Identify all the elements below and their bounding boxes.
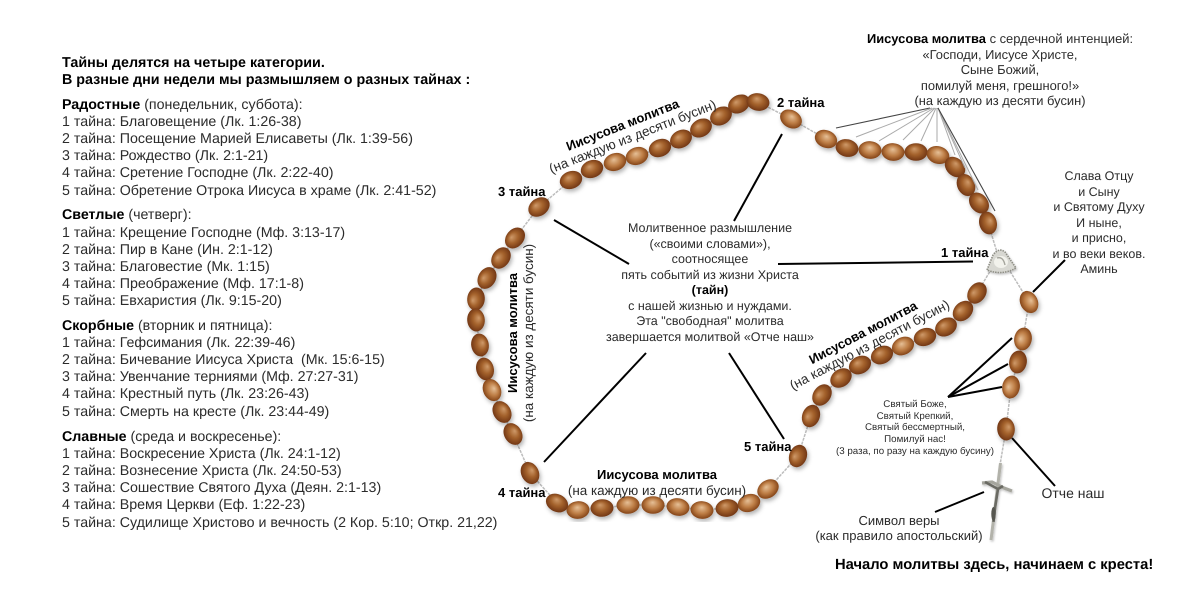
arrow: our father to bead [1012,438,1055,486]
heading: mysteries intro: Тайны делятся на четыре категории. [62,55,325,71]
arrow: meditation to first mystery [778,262,973,264]
text block: joyful mysteries: 3 тайна: Рождество (Лк. 2:1-21) [62,148,268,164]
text block: glory be: Слава Отцу [1064,169,1134,183]
arrow: creed to crucifix [935,492,984,512]
text block: luminous mysteries: Светлые (четверг): [62,207,192,223]
text block: joyful mysteries: 4 тайна: Сретение Господне (Лк. 2:22-40) [62,165,333,181]
arrow: meditation to second mystery [734,134,782,221]
label: jesus prayer bottom decade: (на каждую из десяти бусин) [568,483,746,498]
text block: meditation description: завершается молитвой «Отче наш» [606,330,814,344]
label: creed: Символ веры [858,513,940,528]
heading: mysteries intro: В разные дни недели мы размышляем о разных тайнах : [62,72,470,88]
text block: holy god [836,399,994,457]
label: jesus prayer left decade: Иисусова молитва [505,272,520,393]
label: jesus prayer upper decade: (на каждую из десяти бусин) [547,97,718,176]
label: mystery 1: 1 тайна [941,245,989,260]
arrow: glory be to bead [1033,260,1065,292]
icon: crucifix [982,463,1012,540]
text block: glorious mysteries: Славные (среда и воскресенье): [62,429,281,445]
text block: glorious mysteries: 5 тайна: Судилище Христово и вечность (2 Кор. 5:10; Откр. 21,22) [62,515,497,531]
rosary beads: bottom decade [543,475,782,520]
text block: glorious mysteries: 1 тайна: Воскресение Христа (Лк. 24:1-12) [62,446,341,462]
label: our father: Отче наш [1041,485,1105,501]
text block: joyful mysteries: 2 тайна: Посещение Марией Елисаветы (Лк. 1:39-56) [62,131,413,147]
label: creed [815,513,983,543]
text block: glory be: Аминь [1080,262,1118,276]
label: mystery 4: 4 тайна [498,485,546,500]
text block: meditation description: («своими словами»), [649,237,771,251]
text block: jesus prayer intention: помилуй меня, грешного!» [921,78,1079,93]
label: jesus prayer left decade: (на каждую из десяти бусин) [521,244,536,422]
text block: sorrowful mysteries [62,318,385,420]
text block: holy god: Помилуй нас! [884,434,946,445]
text block: jesus prayer intention: (на каждую из десяти бусин) [914,93,1086,108]
rosary beads: left decade [466,224,529,448]
label: jesus prayer upper decade: Иисусова молитва [564,96,682,154]
label: jesus prayer lower decade: (на каждую из десяти бусин) [787,297,952,393]
arrows: jesus prayer fan to ten beads [836,108,995,211]
text block: sorrowful mysteries: 3 тайна: Увенчание терниями (Мф. 27:27-31) [62,369,358,385]
text block: holy god: (3 раза, по разу на каждую бусину) [836,446,994,457]
rosary beads: pendant [996,288,1042,441]
text block: glory be [1053,169,1145,276]
text block: sorrowful mysteries: 4 тайна: Крестный путь (Лк. 23:26-43) [62,386,309,402]
text block: sorrowful mysteries: Скорбные (вторник и пятница): [62,318,272,334]
text block: glorious mysteries: 4 тайна: Время Церкви (Еф. 1:22-23) [62,497,305,513]
text block: holy god: Святый бессмертный, [865,422,965,433]
callout: start here: Начало молитвы здесь, начинаем с креста! [835,557,1153,573]
text block: glory be: и Сыну [1078,185,1121,199]
text block: glorious mysteries [62,429,497,531]
text block: sorrowful mysteries: 5 тайна: Смерть на кресте (Лк. 23:44-49) [62,404,329,420]
arrow: meditation to fifth mystery [729,353,784,439]
rosary chain [476,102,1029,510]
text block: meditation description: соотносящее [672,252,748,266]
text block: meditation description: пять событий из жизни Христа [621,268,799,282]
label: jesus prayer bottom decade [568,467,746,498]
rosary beads: mystery markers [517,106,810,487]
text block: jesus prayer intention: Сыне Божий, [961,62,1039,77]
text block: joyful mysteries: 5 тайна: Обретение Отрока Иисуса в храме (Лк. 2:41-52) [62,183,436,199]
text block: joyful mysteries: Радостные (понедельник, суббота): [62,97,303,113]
arrow: meditation to third mystery [554,220,629,264]
text block: holy god: Святый Боже, [883,399,947,410]
text block: luminous mysteries: 5 тайна: Евхаристия (Лк. 9:15-20) [62,293,282,309]
text block: luminous mysteries [62,207,345,309]
text block: glory be: и во веки веков. [1053,247,1145,261]
text block: meditation description: (тайн) [692,283,728,297]
text block: glory be: и присно, [1072,231,1126,245]
icon: silver medal [987,250,1016,273]
label: jesus prayer bottom decade: Иисусова молитва [597,467,718,482]
text block: jesus prayer intention: Иисусова молитва с сердечной интенцией: [867,31,1133,46]
rosary beads: lower right decade [799,279,991,430]
heading: mysteries intro [62,55,470,88]
text block: holy god: Святый Крепкий, [877,411,953,422]
text block: luminous mysteries: 4 тайна: Преображение (Мф. 17:1-8) [62,276,304,292]
label: creed: (как правило апостольский) [815,528,983,543]
text block: glory be: И ныне, [1076,216,1122,230]
text block: glory be: и Святому Духу [1053,200,1145,214]
text block: joyful mysteries [62,97,436,199]
label: mystery 3: 3 тайна [498,184,546,199]
text block: luminous mysteries: 3 тайна: Благовестие (Мк. 1:15) [62,259,270,275]
rosary beads: upper decade [557,91,771,192]
text block: meditation description [606,221,814,344]
text block: jesus prayer intention: «Господи, Иисусе Христе, [923,47,1077,62]
text block: glorious mysteries: 3 тайна: Сошествие Святого Духа (Деян. 2:1-13) [62,480,381,496]
arrows: holy god to three beads [948,338,1012,397]
text block: glorious mysteries: 2 тайна: Вознесение Христа (Лк. 24:50-53) [62,463,342,479]
text block: meditation description: Молитвенное размышление [628,221,792,235]
text block: jesus prayer intention [867,31,1133,108]
text block: luminous mysteries: 2 тайна: Пир в Кане (Ин. 2:1-12) [62,242,273,258]
text block: meditation description: Эта "свободная" молитва [636,314,784,328]
label: jesus prayer left decade [505,244,536,422]
text block: sorrowful mysteries: 2 тайна: Бичевание Иисуса Христа (Мк. 15:6-15) [62,352,385,368]
text block: luminous mysteries: 1 тайна: Крещение Господне (Мф. 3:13-17) [62,225,345,241]
text block: sorrowful mysteries: 1 тайна: Гефсимания (Лк. 22:39-46) [62,335,295,351]
rosary beads: top right decade [812,127,999,236]
text block: meditation description: с нашей жизнью и нуждами. [628,299,792,313]
arrow: meditation to fourth mystery [544,353,646,462]
label: mystery 5: 5 тайна [744,439,792,454]
label: jesus prayer lower decade: Иисусова молитва [806,298,920,367]
text block: joyful mysteries: 1 тайна: Благовещение (Лк. 1:26-38) [62,114,301,130]
label: mystery 2: 2 тайна [777,95,825,110]
